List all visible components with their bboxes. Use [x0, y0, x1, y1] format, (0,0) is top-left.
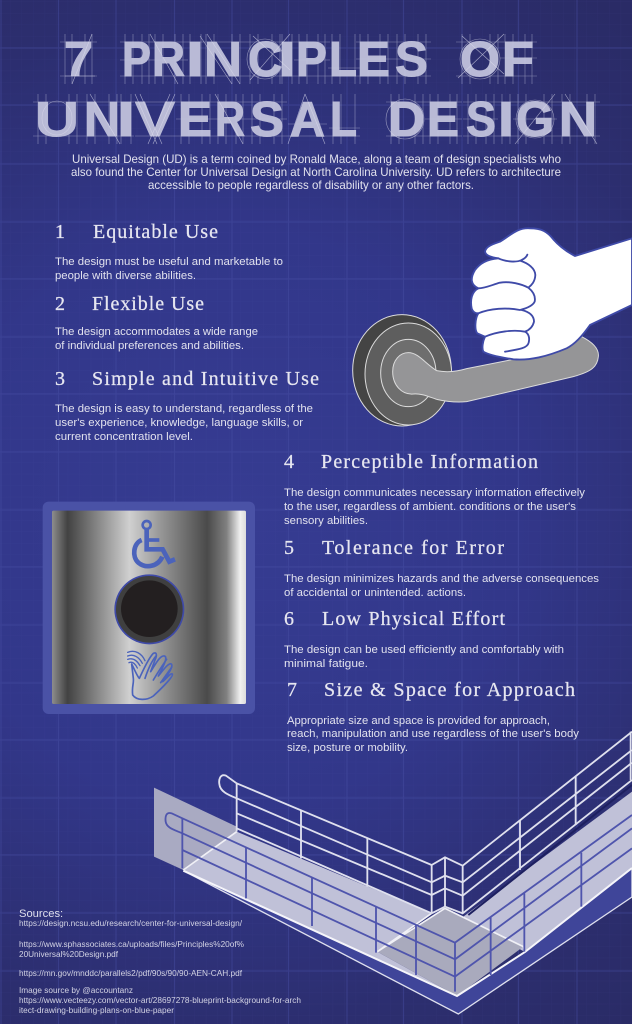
principle 3: simple and intuitive use: Simple and Intuitive Use — [92, 368, 319, 390]
landing — [377, 908, 523, 996]
principle 4: perceptible information: 4 — [284, 451, 294, 473]
principle 3: simple and intuitive use — [55, 368, 319, 443]
title: N — [204, 32, 242, 87]
back railing — [219, 732, 632, 913]
principle 1: equitable use: Equitable Use — [93, 221, 218, 243]
intro text: Universal Design (UD) is a term coined by Ronald Mace, along a team of design specialists who — [72, 152, 561, 166]
principle 6: low physical effort: Low Physical Effort — [322, 608, 505, 630]
principle 7: size and space for approach: size, posture or mobility. — [287, 742, 408, 754]
principle 6: low physical effort: 6 — [284, 608, 294, 630]
sources: Sources: — [19, 908, 63, 920]
sources: https://www.sphassociates.ca/uploads/files/Principles%20of% — [19, 939, 244, 949]
title: E — [178, 92, 212, 147]
title: O — [460, 32, 500, 87]
lever handle — [393, 337, 598, 402]
principle 5: tolerance for error — [284, 537, 599, 599]
principle 3: simple and intuitive use: current concentration level. — [55, 431, 193, 443]
principle 1: equitable use — [55, 221, 283, 282]
title: D — [388, 92, 425, 147]
title: S — [466, 92, 496, 147]
ramp surfaces — [183, 832, 457, 996]
title: I — [278, 32, 296, 87]
illustration: wheelchair ramp — [154, 732, 632, 1014]
title: E — [357, 32, 390, 87]
title: A — [290, 92, 325, 147]
principle 6: low physical effort: The design can be used efficiently and comfortably with — [284, 644, 564, 656]
principle 4: perceptible information — [284, 451, 585, 527]
principle 4: perceptible information: to the user, regardless of ambient. conditions or the user's — [284, 501, 576, 513]
sources — [19, 908, 301, 1015]
title: N — [84, 92, 120, 147]
intro text: accessible to people regardless of disability or any other factors. — [148, 178, 474, 192]
title: R — [152, 32, 185, 87]
title: S — [395, 32, 428, 87]
button — [114, 574, 184, 644]
principle 7: size and space for approach: Appropriate size and space is provided for approach, — [287, 715, 550, 727]
principle 2: flexible use: 2 — [55, 293, 65, 315]
title: P — [296, 32, 327, 87]
title: E — [427, 92, 459, 147]
principle 6: low physical effort — [284, 608, 564, 670]
intro text — [71, 152, 561, 192]
principle 1: equitable use: 1 — [55, 221, 65, 243]
principle 3: simple and intuitive use: The design is easy to understand, regardless of the — [55, 403, 313, 415]
principle 5: tolerance for error: 5 — [284, 537, 294, 559]
principle 5: tolerance for error: Tolerance for Error — [322, 537, 504, 559]
principle 2: flexible use: The design accommodates a wide range — [55, 326, 258, 338]
principle 4: perceptible information: The design communicates necessary information effectively — [284, 487, 585, 499]
title: N — [559, 92, 597, 147]
front railing — [165, 813, 632, 992]
sources: https://www.vecteezy.com/vector-art/28697278-blueprint-background-for-arch — [19, 995, 301, 1005]
principle 5: tolerance for error: of accidental or unintended. actions. — [284, 587, 466, 599]
principle 2: flexible use: Flexible Use — [92, 293, 204, 315]
title: I — [117, 92, 135, 147]
principle 1: equitable use: people with diverse abilities. — [55, 270, 196, 282]
title: S — [250, 92, 284, 147]
illustration: hand on door lever — [353, 228, 632, 426]
title: F — [502, 32, 534, 87]
title: R — [215, 92, 245, 147]
button plate — [43, 502, 255, 714]
principle 6: low physical effort: minimal fatigue. — [284, 658, 368, 670]
principle 5: tolerance for error: The design minimizes hazards and the adverse consequences — [284, 573, 599, 585]
illustration: automatic door push button — [43, 502, 255, 714]
title: L — [330, 92, 357, 147]
icon: wheelchair — [134, 521, 175, 566]
title: U — [35, 92, 79, 147]
hand — [471, 228, 632, 360]
title — [33, 32, 600, 147]
title: G — [516, 92, 554, 147]
icon: waving hand — [128, 651, 172, 699]
principle 2: flexible use — [55, 293, 258, 352]
ramp base — [183, 868, 632, 1014]
sources: https://mn.gov/mnddc/parallels2/pdf/90s/90/90-AEN-CAH.pdf — [19, 968, 243, 978]
sources: itect-drawing-building-plans-on-blue-paper — [19, 1005, 174, 1015]
title: I — [186, 32, 204, 87]
sources: 20Universal%20Design.pdf — [19, 949, 119, 959]
principle 1: equitable use: The design must be useful and marketable to — [55, 256, 283, 268]
principle 4: perceptible information: Perceptible Information — [321, 451, 538, 473]
title: I — [498, 92, 514, 147]
principle 7: size and space for approach: reach, manipulation and use regardless of the user's body — [287, 728, 579, 740]
principle 4: perceptible information: sensory abilities. — [284, 515, 368, 527]
sources: https://design.ncsu.edu/research/center-for-universal-design/ — [19, 918, 243, 928]
title: V — [135, 92, 175, 147]
principle 7: size and space for approach: 7 — [287, 679, 297, 701]
principle 7: size and space for approach: Size & Space for Approach — [324, 679, 575, 701]
principle 2: flexible use: of individual preferences and abilities. — [55, 340, 244, 352]
door rosette — [353, 315, 452, 426]
title: P — [122, 32, 151, 87]
principle 3: simple and intuitive use: 3 — [55, 368, 65, 390]
title: C — [248, 32, 282, 87]
principle 7: size and space for approach — [287, 679, 579, 754]
title: L — [329, 32, 357, 87]
wall end — [154, 788, 237, 870]
title: 7 — [64, 32, 93, 87]
principle 3: simple and intuitive use: user's experience, knowledge, language skills, or — [55, 417, 303, 429]
sources: Image source by @accountanz — [19, 985, 133, 995]
intro text: also found the Center for Universal Design at North Carolina University. UD refers to architecture — [71, 165, 561, 179]
